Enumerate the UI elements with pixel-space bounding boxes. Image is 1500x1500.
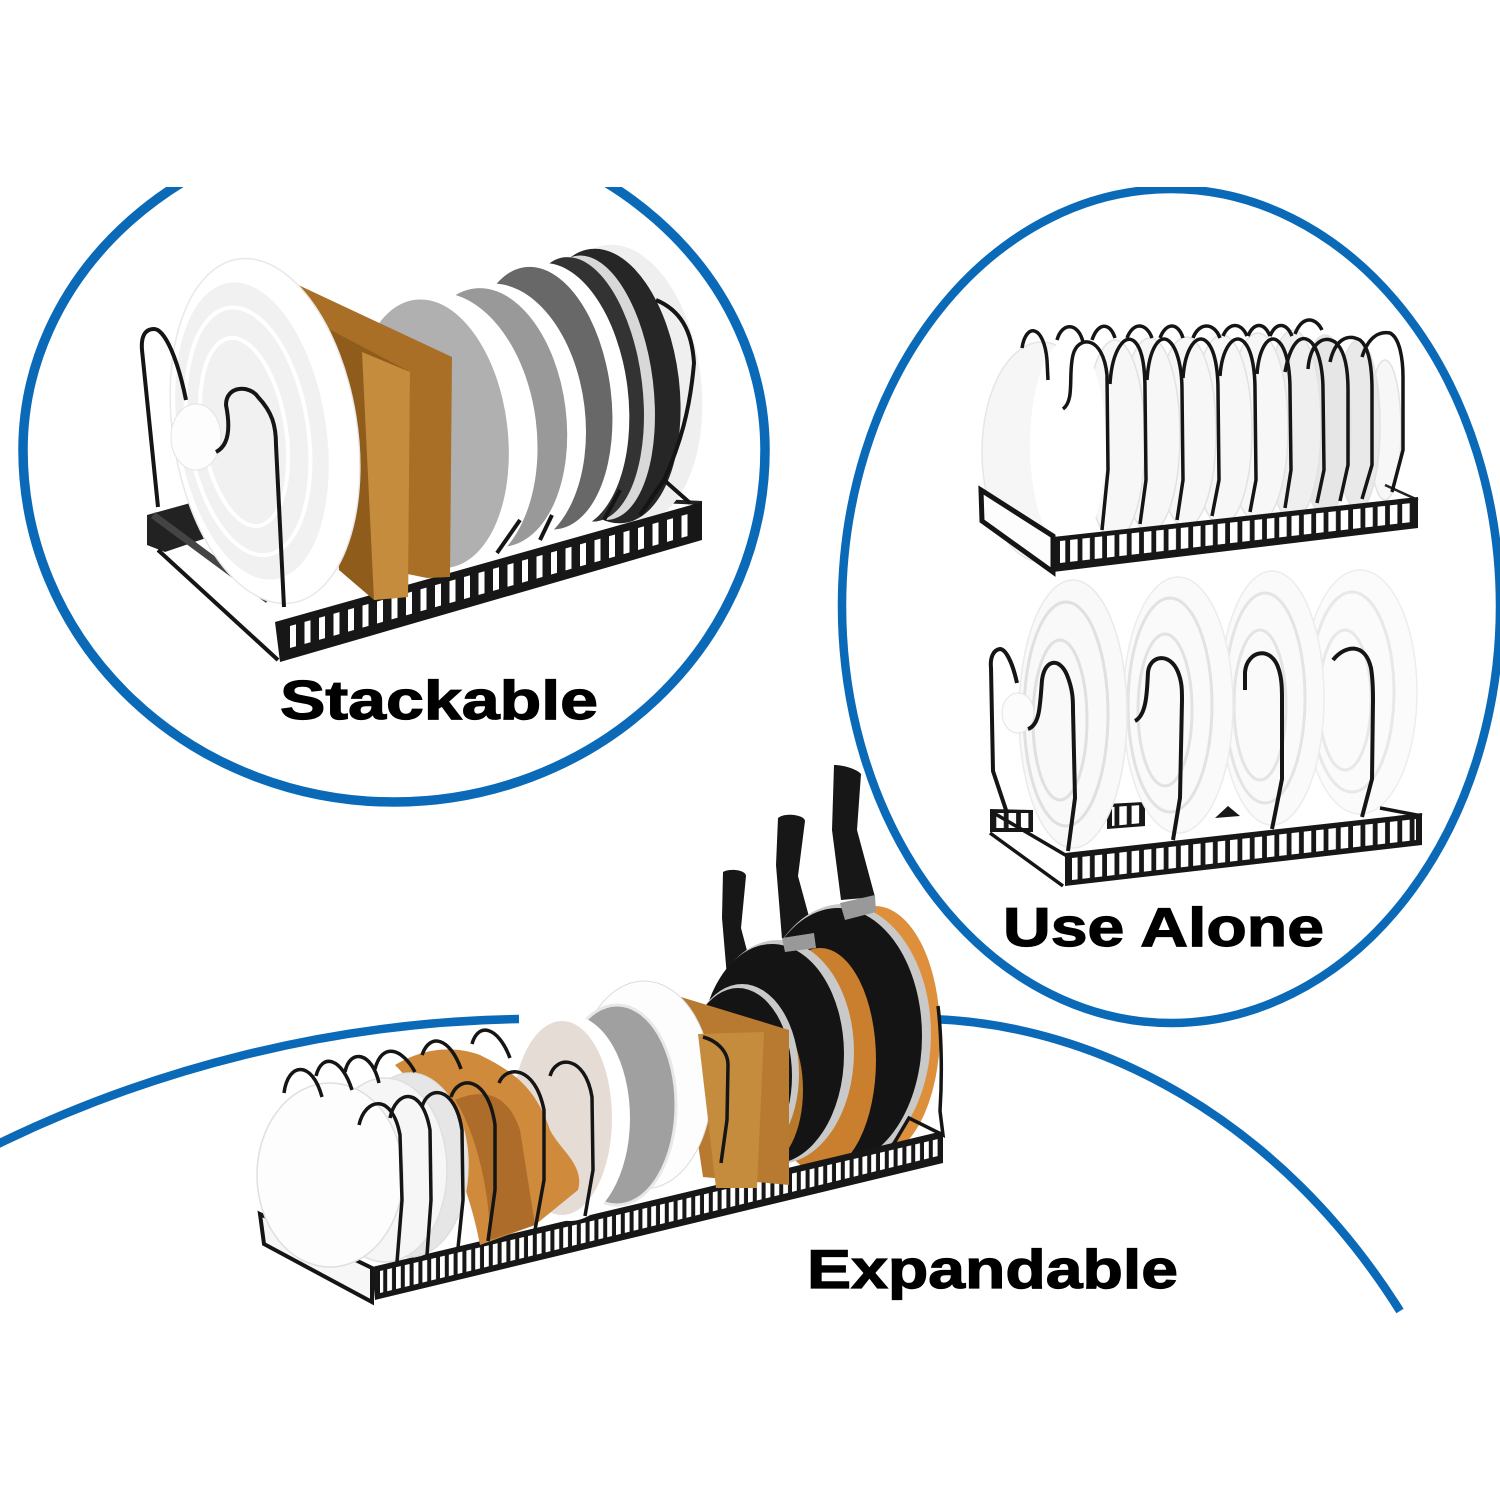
lid (147, 245, 383, 617)
plate front (1030, 340, 1106, 550)
wires (1022, 320, 1403, 530)
rack: expandable (257, 765, 943, 1302)
label: stackable: Stackable (280, 669, 598, 731)
frying pans (684, 895, 940, 1172)
plates (257, 1073, 468, 1267)
plates (1085, 330, 1401, 540)
base (981, 485, 1418, 572)
rack base (275, 502, 702, 662)
front cutting board (698, 1032, 764, 1188)
rack: use alone lower (990, 570, 1422, 886)
wood boards (395, 1049, 579, 1245)
wire dividers (142, 300, 694, 607)
label: use alone: Use Alone (1003, 896, 1324, 958)
base (990, 808, 1422, 886)
panel: use alone outline (842, 189, 1500, 1023)
rack: use alone upper (981, 320, 1418, 572)
label: expandable: Expandable (807, 1238, 1178, 1300)
pan handles (722, 765, 875, 981)
panel: stackable outline (23, 124, 765, 802)
rear rails (147, 500, 702, 660)
rear cutting board (658, 990, 789, 1185)
wires (284, 1006, 943, 1262)
pans (336, 236, 721, 582)
wires (991, 649, 1373, 851)
large plate (982, 342, 1102, 562)
lids and trays (510, 981, 712, 1221)
rack: stackable (142, 236, 721, 662)
lids (1002, 570, 1417, 848)
rear base fragments (990, 802, 1240, 832)
cutting boards (294, 283, 452, 600)
infographic canvas (0, 187, 1500, 1314)
rack base (260, 1131, 943, 1302)
panel: expandable outline (0, 1019, 1400, 1311)
